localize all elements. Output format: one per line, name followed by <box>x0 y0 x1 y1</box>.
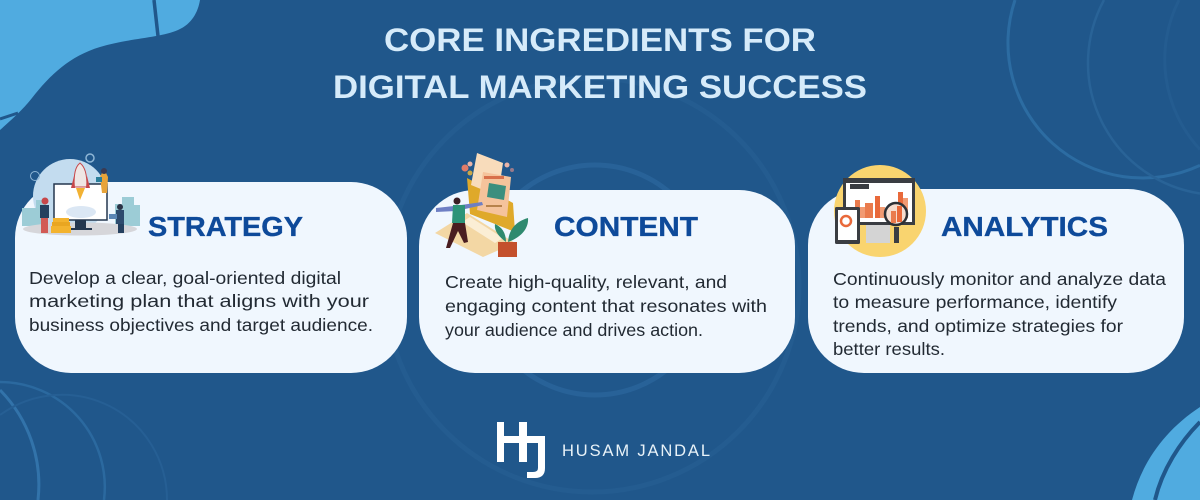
strategy card background <box>15 182 407 373</box>
analytics description: to measure performance, identify <box>833 292 1117 312</box>
logo mark <box>497 422 545 478</box>
heading: analytics: ANALYTICS <box>941 211 1108 242</box>
heading: content: CONTENT <box>554 211 698 242</box>
content description: engaging content that resonates with <box>445 296 767 316</box>
analytics description <box>833 269 1166 359</box>
title: CORE INGREDIENTS FOR <box>384 22 816 58</box>
strategy description: business objectives and target audience. <box>29 315 373 335</box>
icon: rocket launch on monitor <box>22 154 140 236</box>
analytics description: trends, and optimize strategies for <box>833 316 1123 336</box>
panel: strategy <box>15 154 407 373</box>
content description: your audience and drives action. <box>445 320 703 340</box>
icon: analytics dashboard <box>834 165 926 257</box>
icon: content creator with laptop <box>435 153 528 257</box>
analytics description: Continuously monitor and analyze data <box>833 269 1166 289</box>
content card background <box>419 190 795 373</box>
strategy description: Develop a clear, goal-oriented digital <box>29 268 341 288</box>
title: DIGITAL MARKETING SUCCESS <box>333 69 867 105</box>
decorative blob: bottom right <box>1132 407 1200 500</box>
title <box>333 22 867 105</box>
content description: Create high-quality, relevant, and <box>445 272 727 292</box>
heading: strategy: STRATEGY <box>148 211 303 242</box>
strategy description: marketing plan that aligns with your <box>29 291 369 311</box>
logo wordmark: HUSAM JANDAL <box>562 442 710 460</box>
decorative blob: top left <box>0 0 200 130</box>
logo: Husam Jandal <box>497 422 710 478</box>
panel: analytics <box>808 165 1184 373</box>
content description <box>445 272 767 340</box>
panel: content <box>419 153 795 373</box>
analytics description: better results. <box>833 339 945 359</box>
analytics card background <box>808 189 1184 373</box>
strategy description <box>29 268 373 335</box>
